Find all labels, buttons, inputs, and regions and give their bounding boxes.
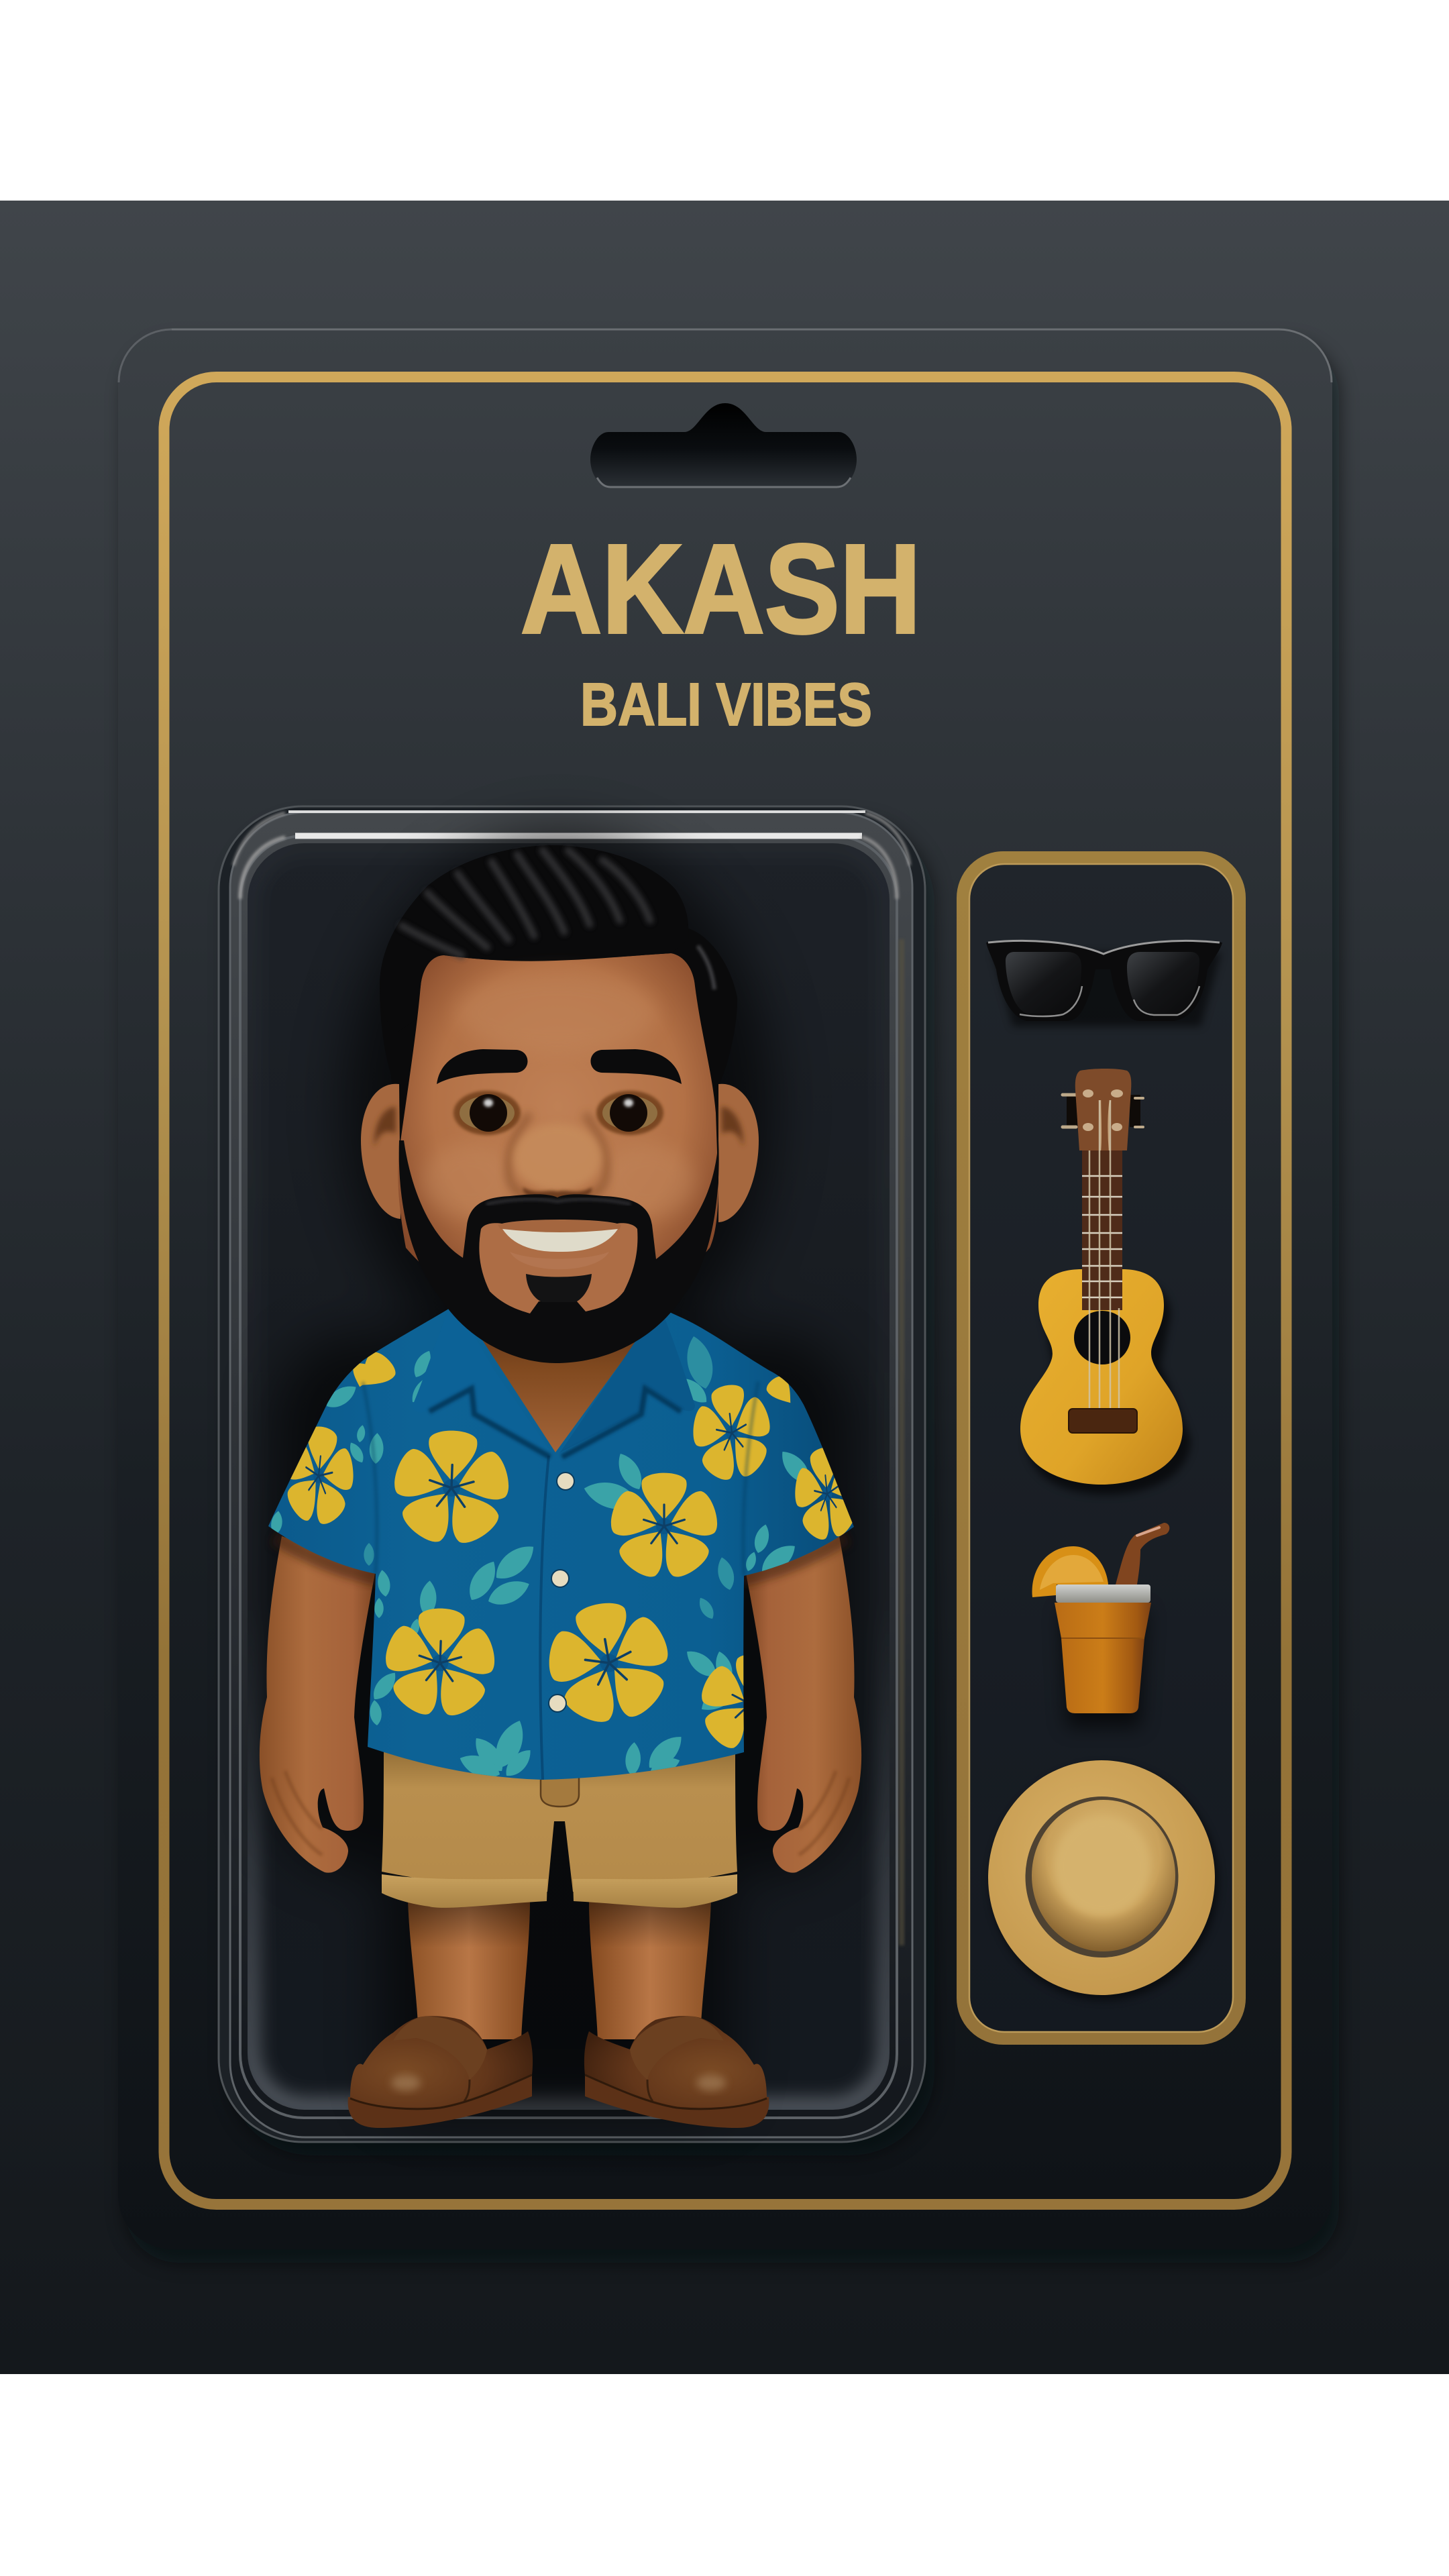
hang hole (590, 403, 857, 487)
strings (1089, 1100, 1119, 1409)
placket (540, 1456, 549, 1780)
chin and mouth (479, 1220, 637, 1313)
gold border (164, 377, 1287, 2204)
bridge (1069, 1409, 1137, 1433)
right arm (742, 1536, 861, 1873)
left shoe (348, 2016, 533, 2128)
crown top (1054, 1817, 1150, 1916)
left ear (361, 1084, 400, 1219)
beard (399, 1140, 719, 1363)
buttons (549, 1472, 574, 1712)
neck (1082, 1150, 1122, 1310)
face (398, 953, 718, 1318)
left collar (413, 1309, 551, 1452)
nose (508, 1114, 606, 1199)
crown (1032, 1800, 1175, 1951)
shirt pattern (270, 1334, 866, 1783)
icon: straw hat (988, 1760, 1218, 2000)
icon: sunglasses (986, 941, 1222, 1026)
cup collar (1055, 1603, 1151, 1638)
right eyebrow (590, 1049, 682, 1084)
figure: action figure (260, 832, 866, 2128)
tuners (1067, 1095, 1140, 1127)
panel: blister card (118, 329, 1339, 2263)
figure shadow (275, 832, 852, 2113)
sleeve seams (363, 1382, 758, 1576)
right collar (560, 1308, 695, 1452)
cup lower (1061, 1638, 1144, 1713)
body (1020, 1269, 1183, 1485)
subtitle: BALI VIBES (580, 672, 872, 739)
right eye (596, 1091, 663, 1135)
hair top (380, 845, 714, 1033)
left leg (408, 1898, 530, 2039)
sound hole (1074, 1311, 1130, 1364)
cup rim (1056, 1585, 1150, 1603)
icon: cup with straw (1032, 1523, 1169, 1727)
face shading (423, 973, 694, 1218)
panel: clear blister (219, 806, 934, 2155)
teal leaves (270, 1334, 815, 1783)
orange slice (1032, 1546, 1108, 1597)
neck (462, 1308, 661, 1456)
moustache highlight (486, 1199, 631, 1204)
panel: accessories (963, 857, 1240, 2038)
yellow flowers (276, 1348, 866, 1764)
frets (1082, 1176, 1122, 1297)
right ear (718, 1084, 759, 1222)
hat band (1025, 1796, 1178, 1957)
left arm (260, 1536, 379, 1873)
glass glow (248, 1642, 890, 2110)
lower lip (510, 1252, 609, 1269)
right shoe (584, 2016, 769, 2128)
title: AKASH (521, 519, 921, 660)
left eyebrow (437, 1049, 527, 1084)
shorts (382, 1744, 737, 1908)
icon: ukulele (1020, 1069, 1191, 1495)
left eye (453, 1091, 521, 1135)
brim (988, 1760, 1215, 1995)
hair back (380, 845, 737, 1140)
right leg (589, 1898, 711, 2039)
teeth (502, 1229, 618, 1252)
hair ridges (402, 851, 650, 955)
shirt (268, 1308, 866, 1783)
headstock (1075, 1069, 1131, 1150)
straw (1116, 1523, 1169, 1585)
